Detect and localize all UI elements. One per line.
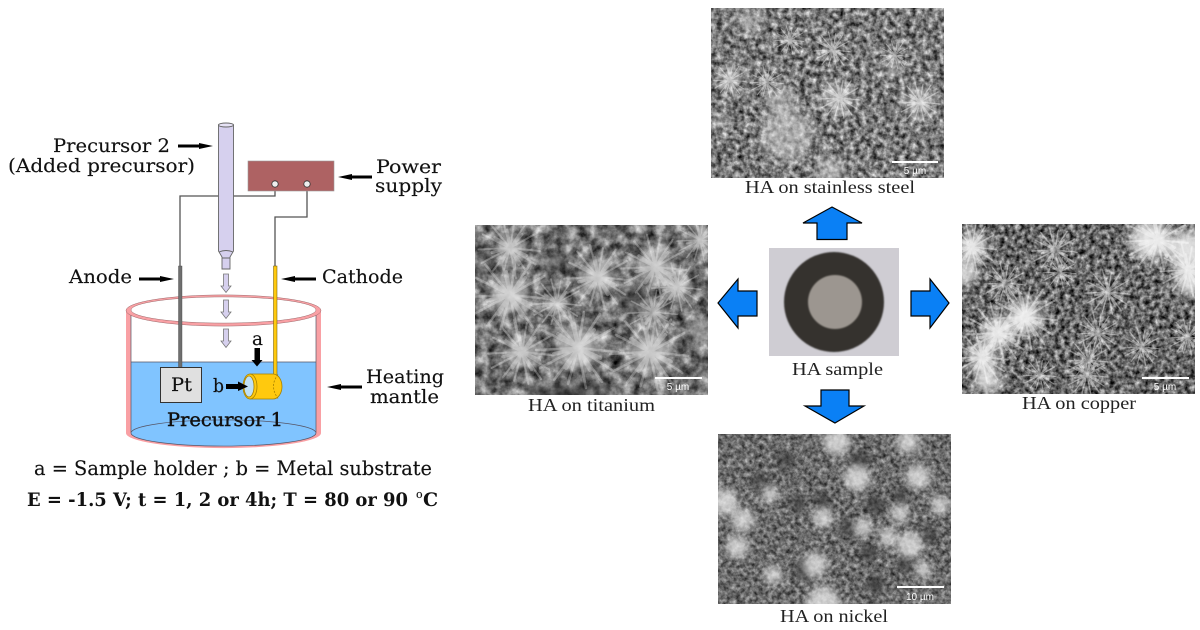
beaker rim (126, 295, 321, 326)
SEM image: HA on nickel (718, 434, 951, 604)
label: power: Power (376, 156, 442, 178)
scale bar (655, 377, 702, 379)
crystal stars (962, 224, 1195, 394)
bright clusters (712, 8, 935, 184)
scale bar (1142, 377, 1189, 379)
SEM image: HA on copper (962, 224, 1195, 394)
label: anode: Anode (68, 266, 132, 288)
power terminals (272, 181, 310, 187)
label: b: b (213, 375, 224, 397)
bright clusters (953, 220, 1200, 393)
label: cathode: Cathode (322, 266, 403, 288)
scale text: 10 µm (906, 592, 934, 603)
precursor tube (218, 123, 234, 269)
crystal stars (713, 26, 940, 122)
cathode rod (274, 266, 277, 376)
label: mantle: mantle (370, 386, 439, 408)
scale bar (892, 161, 938, 163)
dark patches (753, 451, 938, 594)
crystal stars (475, 225, 708, 392)
sample disc (784, 252, 884, 352)
label: supply: supply (375, 175, 442, 197)
caption: stainless steel: HA on stainless steel (745, 177, 915, 197)
dark shadows (476, 250, 649, 402)
caption: copper: HA on copper (1022, 393, 1136, 413)
schematic: electrochemical cell (8, 123, 444, 511)
legend: a and b: a = Sample holder ; b = Metal substrate (34, 456, 432, 480)
scale text: 5 µm (667, 382, 689, 393)
celsius symbol: C (423, 489, 438, 511)
SEM image: HA on titanium (475, 225, 708, 395)
drop arrows (221, 274, 231, 348)
label: precursor 1: Precursor 1 (167, 409, 283, 431)
power supply box (248, 161, 334, 191)
scale bar (897, 586, 944, 588)
degree mark: o (416, 488, 423, 501)
coated centre (808, 275, 862, 329)
label: added precursor: (Added precursor) (8, 155, 195, 177)
water (131, 362, 316, 446)
caption: titanium: HA on titanium (528, 395, 655, 415)
label: heating: Heating (366, 366, 444, 388)
scale text: 5 µm (1154, 382, 1176, 393)
sample holder (243, 374, 282, 399)
arrow: left (718, 279, 757, 328)
beaker mantle (126, 310, 321, 448)
arrow: down (805, 390, 864, 423)
caption: HA sample: HA sample (792, 359, 883, 379)
caption: nickel: HA on nickel (780, 606, 888, 626)
anode rod (178, 266, 182, 368)
scale text: 5 µm (904, 166, 926, 177)
platinum electrode (160, 368, 202, 402)
black arrows (139, 143, 372, 391)
arrow: up (803, 207, 862, 240)
arrow: right (911, 279, 949, 328)
SEM image: HA on stainless steel (711, 8, 944, 184)
wires (180, 188, 307, 268)
label: a: a (252, 328, 263, 350)
conditions line: E = -1.5 V; t = 1, 2 or 4h; T = 80 or 90 (27, 489, 408, 511)
bright clusters (492, 230, 710, 370)
bright clusters (718, 434, 951, 604)
photo: HA sample (769, 248, 899, 356)
label: Pt: Pt (171, 374, 192, 396)
beaker interior (131, 309, 316, 446)
label: precursor 2: Precursor 2 (53, 135, 170, 157)
water surface and walls (131, 311, 316, 446)
